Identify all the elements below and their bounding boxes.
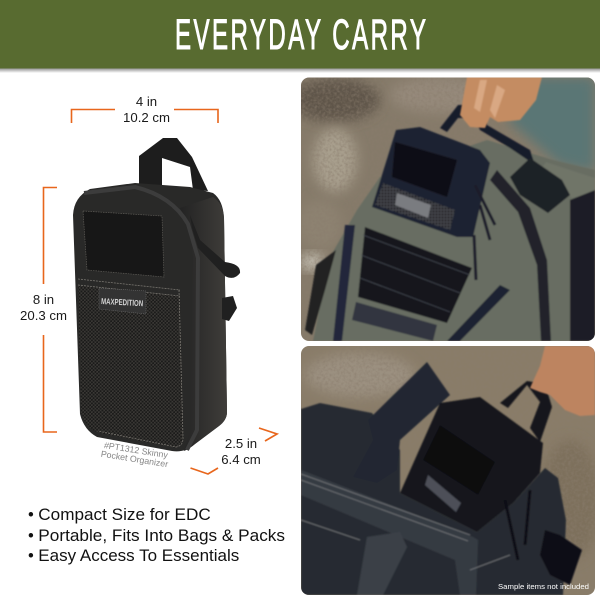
handle strap	[440, 105, 535, 165]
brand label: MAXPEDITION	[101, 296, 143, 308]
organizer label	[395, 193, 431, 218]
feature list: •	[28, 506, 34, 524]
dimension: width: 10.2 cm	[123, 110, 170, 125]
feature list: Portable, Fits Into Bags & Packs	[38, 527, 285, 545]
dimension: depth: 2.5 in	[225, 436, 257, 451]
product caption: Pocket Organizer	[100, 449, 169, 469]
organizer velcro	[392, 142, 457, 197]
organizer pouch	[400, 397, 543, 532]
foliage	[505, 77, 595, 172]
title: EVERYDAY CARRY	[175, 11, 426, 59]
ground background	[290, 77, 595, 341]
side zipper	[333, 225, 355, 341]
product caption: #PT1312 Skinny	[103, 440, 169, 460]
carry strap	[357, 532, 407, 595]
pouch label	[425, 475, 461, 512]
dimension: width: 4 in	[136, 94, 157, 109]
velcro panel	[358, 227, 472, 323]
range bag body	[301, 403, 566, 595]
feature list: Easy Access To Essentials	[38, 547, 239, 565]
photo: organizer in range bag	[301, 346, 600, 595]
flap	[372, 362, 450, 450]
pouch velcro	[423, 425, 495, 495]
zipper right	[490, 170, 551, 341]
brand label	[99, 288, 146, 314]
feature list: Compact Size for EDC	[38, 506, 211, 524]
feature list: •	[28, 547, 34, 565]
dimension: width	[72, 94, 218, 125]
pocket stitching	[78, 279, 183, 447]
product illustration: pocket organizer	[73, 138, 240, 451]
cord	[505, 490, 530, 560]
dimension: height: 8 in	[33, 292, 54, 307]
header band	[0, 0, 600, 73]
ground background	[301, 346, 600, 595]
diagonal zipper	[447, 285, 510, 341]
backpack body	[313, 140, 595, 341]
left side strap	[305, 250, 336, 335]
organizer mesh	[375, 183, 455, 230]
dimension: height: 20.3 cm	[20, 308, 67, 323]
handle	[139, 138, 208, 191]
mesh pocket	[78, 286, 183, 448]
dimension: depth: 6.4 cm	[221, 452, 261, 467]
disclaimer: Sample items not included	[498, 582, 589, 591]
bag handle	[500, 381, 552, 442]
backpack top pocket	[546, 168, 593, 195]
organizer pouch	[372, 127, 490, 237]
zipper pull cord	[190, 215, 240, 321]
dimension: height	[20, 188, 67, 432]
hand	[530, 346, 595, 416]
right shoulder strap	[570, 190, 595, 341]
buckle	[540, 530, 582, 585]
bag seam ridge	[301, 470, 478, 595]
zipper	[84, 187, 198, 450]
product caption	[100, 440, 170, 469]
velcro stitching	[360, 235, 470, 312]
pouch cords	[474, 185, 495, 280]
photo: organizer on backpack	[290, 77, 595, 341]
stitching	[301, 474, 510, 570]
bag side panel	[180, 197, 227, 451]
velcro patch	[83, 211, 164, 277]
feature list	[28, 506, 285, 565]
hand	[460, 77, 542, 128]
lower webbing	[352, 302, 437, 341]
feature list: •	[28, 527, 34, 545]
bag body	[73, 183, 227, 451]
dimension: depth	[190, 428, 277, 474]
strap tag	[510, 158, 570, 213]
